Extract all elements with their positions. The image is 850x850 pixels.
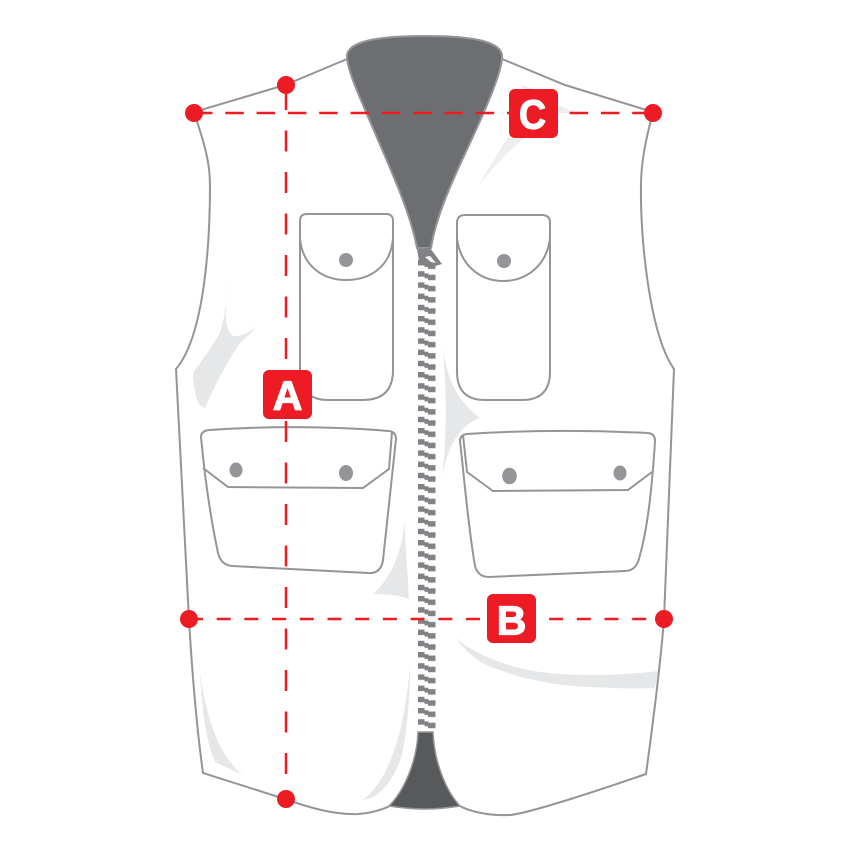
pocket button <box>497 254 511 268</box>
label C: C <box>519 92 546 138</box>
shadow: lower left hem <box>200 673 243 775</box>
pocket button <box>230 462 242 478</box>
label B: B <box>497 597 526 643</box>
shadow: upper right collar fold <box>478 85 577 186</box>
fabric fold shadows <box>193 85 658 800</box>
point: A top <box>277 76 295 94</box>
pocket button <box>339 465 353 481</box>
zipper pull <box>417 248 442 267</box>
point: B left <box>180 610 198 628</box>
label B <box>487 594 536 643</box>
measurement line B <box>180 610 673 628</box>
shadow: left armhole <box>193 278 258 408</box>
point: B right <box>655 610 673 628</box>
point: A bottom <box>277 790 295 808</box>
point: C left <box>185 104 203 122</box>
pocket: upper left <box>300 214 393 400</box>
shadow: lower right fold <box>455 637 658 688</box>
shadow: lower centre fold <box>363 665 410 800</box>
shadow: centre left fold <box>373 520 409 599</box>
label C <box>509 89 558 138</box>
point: C right <box>644 104 662 122</box>
label A: A <box>273 372 302 418</box>
pocket: lower right <box>460 431 655 577</box>
shadow: centre right fold <box>442 340 480 477</box>
collar inner back <box>347 36 502 248</box>
vest body outline <box>176 59 674 815</box>
pocket button <box>502 468 517 484</box>
measurement line C <box>185 104 662 122</box>
pocket button <box>614 466 626 480</box>
pocket button <box>339 253 353 267</box>
zipper teeth <box>418 260 437 730</box>
pocket: upper right <box>457 215 550 400</box>
pocket: lower left <box>201 427 396 573</box>
measurement line A <box>277 76 295 808</box>
label A <box>263 370 312 419</box>
bottom inner back <box>389 732 460 809</box>
